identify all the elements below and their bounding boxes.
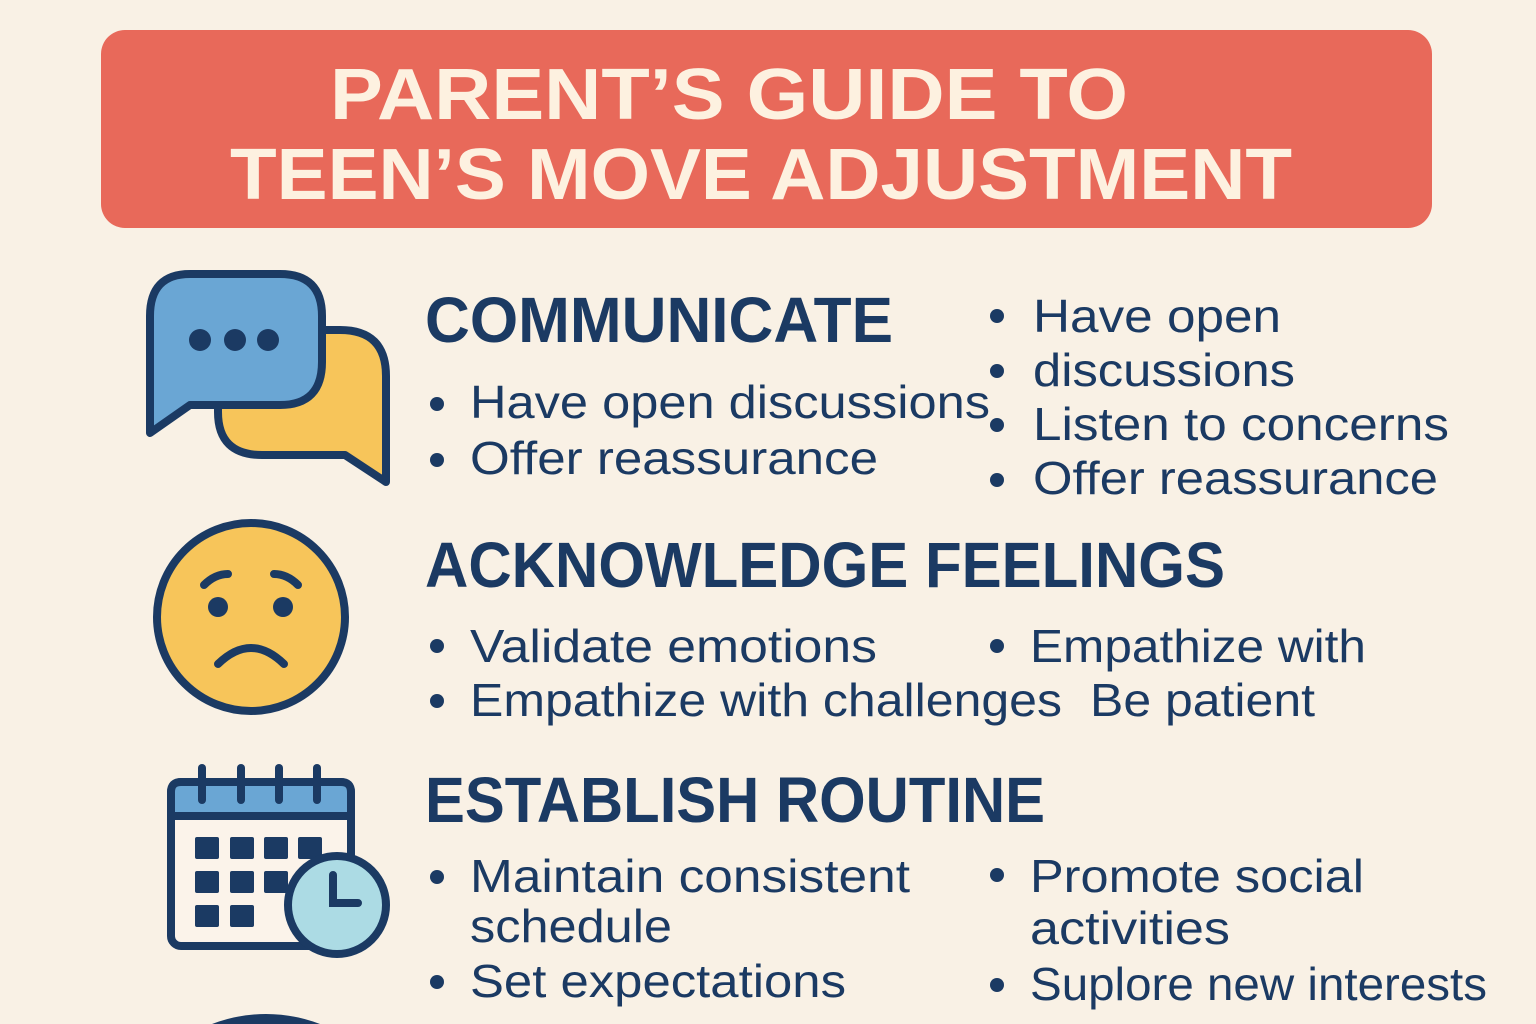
section: communicate: Have open discussions bbox=[470, 376, 990, 428]
section: communicate: Offer reassurance bbox=[470, 432, 878, 484]
section: establish routine: Maintain consistent bbox=[470, 850, 910, 902]
section: acknowledge feelings: Empathize with bbox=[1030, 620, 1366, 672]
title banner bbox=[101, 30, 1432, 228]
section: communicate: Have open bbox=[1033, 290, 1281, 342]
section: acknowledge feelings: Empathize with challenges bbox=[470, 674, 1062, 726]
section: acknowledge feelings bbox=[425, 529, 1366, 726]
title banner: TEEN’S MOVE ADJUSTMENT bbox=[230, 135, 1292, 215]
section: establish routine: ESTABLISH ROUTINE bbox=[425, 764, 1045, 836]
section: establish routine: Set expectations bbox=[470, 955, 846, 1007]
section: communicate bbox=[425, 284, 1449, 504]
section: acknowledge feelings: Validate emotions bbox=[470, 620, 877, 672]
section: establish routine: Promote social bbox=[1030, 850, 1364, 902]
title banner: PARENT’S GUIDE TO bbox=[330, 55, 1128, 135]
icon: sad face bbox=[157, 523, 345, 711]
icon: partial circle at bottom bbox=[212, 1014, 320, 1024]
section: communicate: Listen to concerns bbox=[1033, 398, 1449, 450]
section: acknowledge feelings: ACKNOWLEDGE FEELINGS bbox=[425, 529, 1225, 601]
section: acknowledge feelings: Be patient bbox=[1090, 674, 1315, 726]
icon: calendar with clock bbox=[171, 768, 386, 954]
icon: chat bubbles bbox=[150, 274, 386, 482]
section: establish routine: schedule bbox=[470, 900, 672, 952]
section: establish routine: Suplore new interests bbox=[1030, 958, 1487, 1010]
section: communicate: Offer reassurance bbox=[1033, 452, 1438, 504]
section: communicate: discussions bbox=[1033, 344, 1295, 396]
section: communicate: COMMUNICATE bbox=[425, 284, 893, 356]
section: establish routine bbox=[425, 764, 1487, 1010]
section: establish routine: activities bbox=[1030, 902, 1230, 954]
